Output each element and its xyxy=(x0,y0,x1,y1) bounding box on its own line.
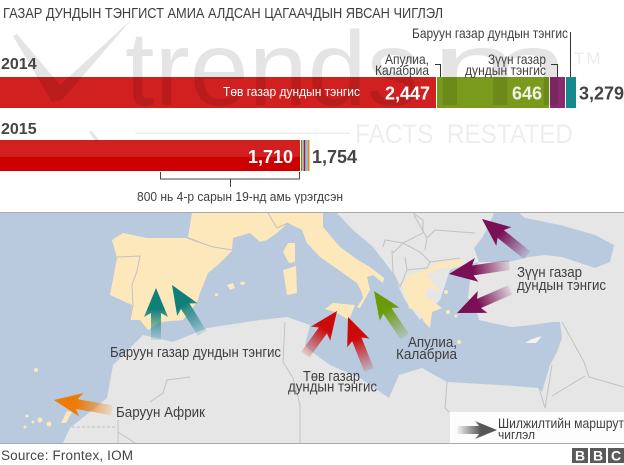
arrow: Apulia Calabria xyxy=(364,284,415,343)
watermark: TM xyxy=(574,49,603,68)
arrow: Central Mediterranean 2 xyxy=(337,313,380,374)
map labels: Калабриа xyxy=(396,346,458,363)
map labels xyxy=(110,264,606,421)
map labels: Апулиа, xyxy=(408,334,457,351)
map labels: Баруун газар дундын тэнгис xyxy=(110,344,281,361)
label: East Mediterranean with leader xyxy=(465,51,558,78)
Spain and Portugal xyxy=(110,233,233,330)
title: ГАЗАР ДУНДЫН ТЭНГИСТ АМИА АЛДСАН ЦАГААЧДЫН ЯВСАН ЧИГЛЭЛ xyxy=(3,6,443,22)
land: North Africa xyxy=(63,317,560,443)
map labels: Баруун Африк xyxy=(116,404,205,421)
label: East Mediterranean with leader: дундын тэнгис xyxy=(465,62,546,78)
BBC logo: B xyxy=(593,448,603,464)
value 1,710: 1,710 xyxy=(248,147,293,167)
label: East Mediterranean with leader: Зүүн газар xyxy=(488,51,546,67)
value 2,447: 2,447 xyxy=(385,84,430,104)
Cyprus xyxy=(525,336,542,343)
Black Sea xyxy=(474,213,614,268)
bar 2014 xyxy=(0,77,576,108)
land: Europe, Turkey and Middle East xyxy=(337,213,624,443)
watermark: FACTS RESTATED xyxy=(355,119,573,149)
bar label: Central Mediterranean: Төв газар дундын тэнгис xyxy=(223,84,360,99)
label: West Mediterranean with leader: Баруун газар дундын тэнгис xyxy=(412,25,568,41)
map labels: Төв газар xyxy=(303,368,360,385)
watermark xyxy=(13,10,603,149)
year label 2014: 2014 xyxy=(1,56,37,73)
BBC logo: C xyxy=(611,448,621,464)
bracket annotation xyxy=(137,172,343,204)
watermark: m xyxy=(431,10,569,128)
BBC logo xyxy=(572,448,624,464)
arrow: West Mediterranean 2 xyxy=(162,279,212,340)
arrow: Central Mediterranean 1 xyxy=(296,304,347,362)
borders xyxy=(72,213,624,443)
map labels: дундын тэнгис xyxy=(517,277,606,294)
year label 2015: 2015 xyxy=(1,121,37,138)
arrow: West Africa xyxy=(52,388,114,422)
source: Source: Frontex, IOM xyxy=(1,448,133,463)
watermark: trends xyxy=(125,10,420,128)
bracket annotation: 800 нь 4-р сарын 19-нд амь үрэгдсэн xyxy=(137,189,343,204)
islands xyxy=(24,243,464,428)
BBC logo: B xyxy=(575,448,585,464)
map legend: чиглэл xyxy=(498,427,535,442)
France and Italy xyxy=(188,213,384,308)
arrow: West Mediterranean 1 xyxy=(144,288,168,340)
map labels: Зүүн газар xyxy=(517,264,582,281)
map panel xyxy=(0,210,624,444)
arrow: East Mediterranean 2 xyxy=(447,253,511,286)
label: Apulia Calabria with leader: Калабриа xyxy=(375,62,429,78)
map legend xyxy=(450,412,624,443)
value 646: 646 xyxy=(512,84,542,104)
arrow: East Mediterranean 3 xyxy=(452,279,515,324)
icon: legend arrow xyxy=(457,421,497,439)
map labels: дундын тэнгис xyxy=(288,378,377,396)
total 1,754: 1,754 xyxy=(312,147,357,167)
label: Apulia Calabria with leader xyxy=(375,51,440,78)
arrow: East Mediterranean 1 xyxy=(474,210,535,265)
bar 2015 xyxy=(0,140,310,171)
label: Apulia Calabria with leader: Апулиа, xyxy=(385,51,429,67)
total 3,279: 3,279 xyxy=(579,84,624,104)
